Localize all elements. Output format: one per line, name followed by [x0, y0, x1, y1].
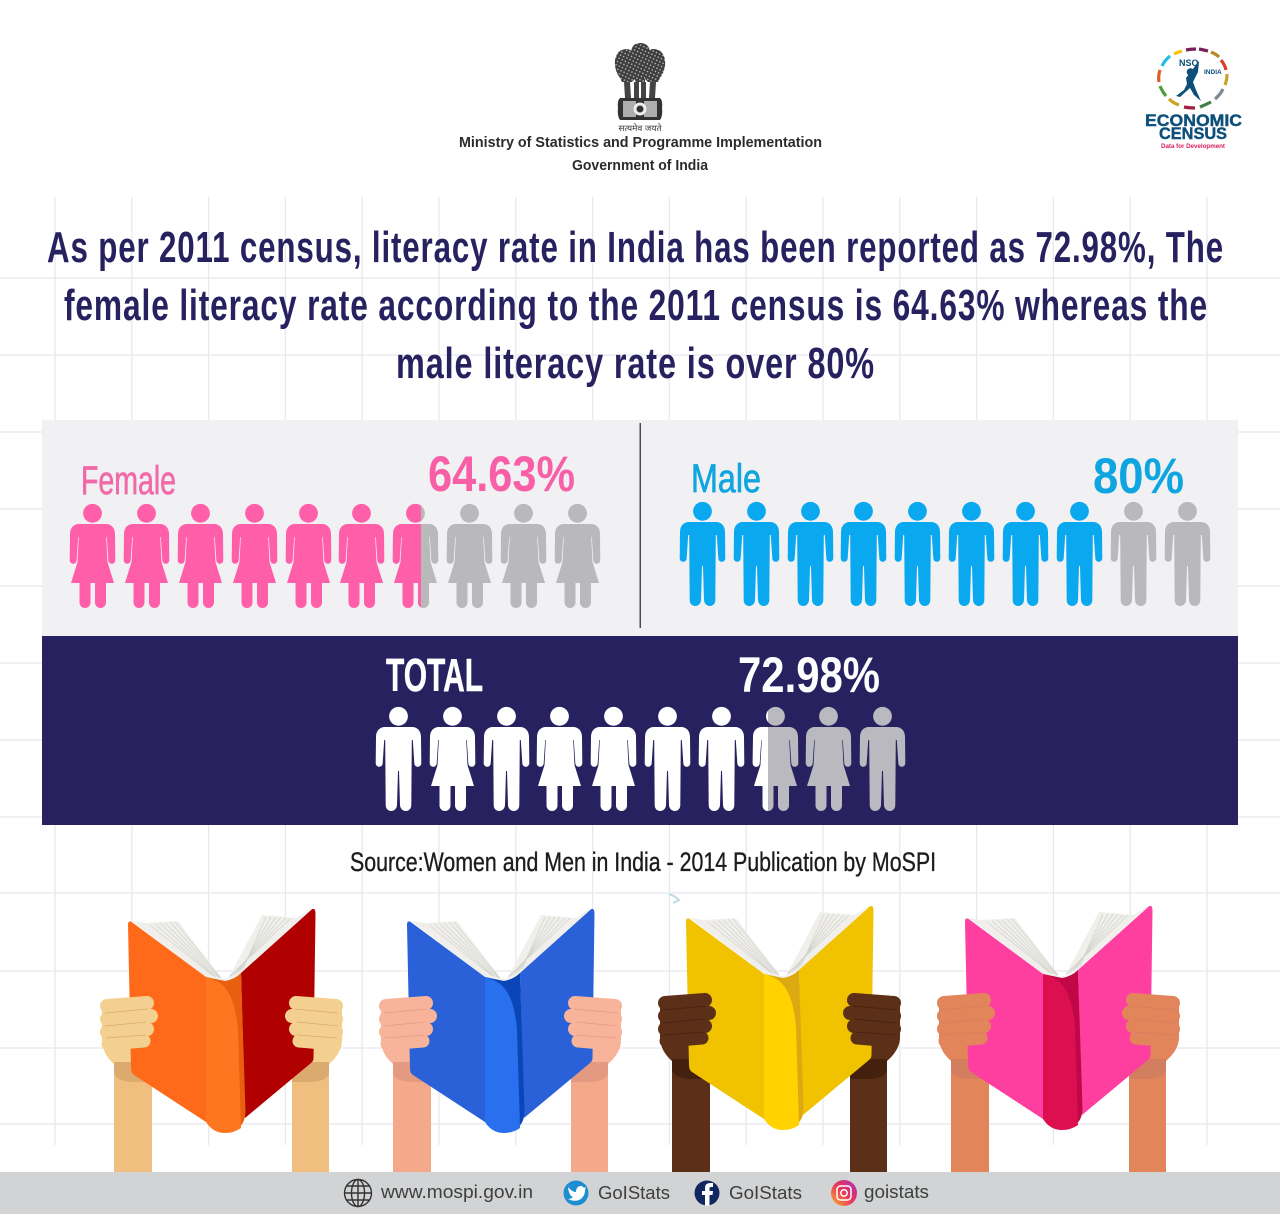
tagline: Data for Development [1161, 143, 1226, 150]
pictogram: total [376, 707, 905, 811]
illustration: yellow book held by hands [660, 905, 900, 1175]
website: www.mospi.gov.in [380, 1181, 533, 1202]
icon: twitter [564, 1180, 588, 1206]
twitter handle: GoIStats [598, 1182, 670, 1203]
pictogram: male [680, 502, 1210, 606]
logo INDIA: INDIA [1204, 69, 1222, 76]
logo: economic census [1145, 49, 1242, 150]
economic text: ECONOMIC [1145, 112, 1242, 130]
instagram handle: goistats [864, 1181, 929, 1202]
footer bar [0, 1172, 1280, 1214]
illustration: blue book held by hands [381, 908, 621, 1178]
total label: TOTAL [386, 649, 483, 701]
icon: facebook [694, 1180, 720, 1206]
heading: male literacy rate is over 80% [396, 339, 875, 388]
census text: CENSUS [1159, 125, 1227, 143]
emblem motto: सत्यमेव जयते [618, 123, 662, 133]
icon: instagram [831, 1180, 857, 1206]
icon: national emblem [615, 43, 665, 120]
panel: female and male [42, 420, 1238, 636]
male label: Male [691, 457, 761, 501]
panel: total [42, 636, 1238, 825]
female value: 64.63% [428, 446, 575, 502]
logo NSO: NSO [1179, 58, 1199, 68]
logo ring [1159, 49, 1227, 108]
source note: Source:Women and Men in India - 2014 Publication by MoSPI [350, 847, 936, 877]
ministry name: Ministry of Statistics and Programme Implementation [459, 135, 822, 151]
illustration: orange book held by hands [102, 908, 342, 1178]
logo figure [1176, 61, 1201, 101]
icon: globe [344, 1180, 372, 1206]
facebook handle: GoIStats [729, 1182, 802, 1203]
illustration: pink book held by hands [939, 905, 1179, 1175]
pictogram: female [70, 504, 600, 608]
female label: Female [81, 459, 176, 503]
header: ministry block [459, 43, 822, 174]
heading [47, 223, 1224, 388]
total value: 72.98% [738, 647, 880, 703]
male value: 80% [1093, 448, 1184, 504]
government of india: Government of India [572, 158, 709, 174]
